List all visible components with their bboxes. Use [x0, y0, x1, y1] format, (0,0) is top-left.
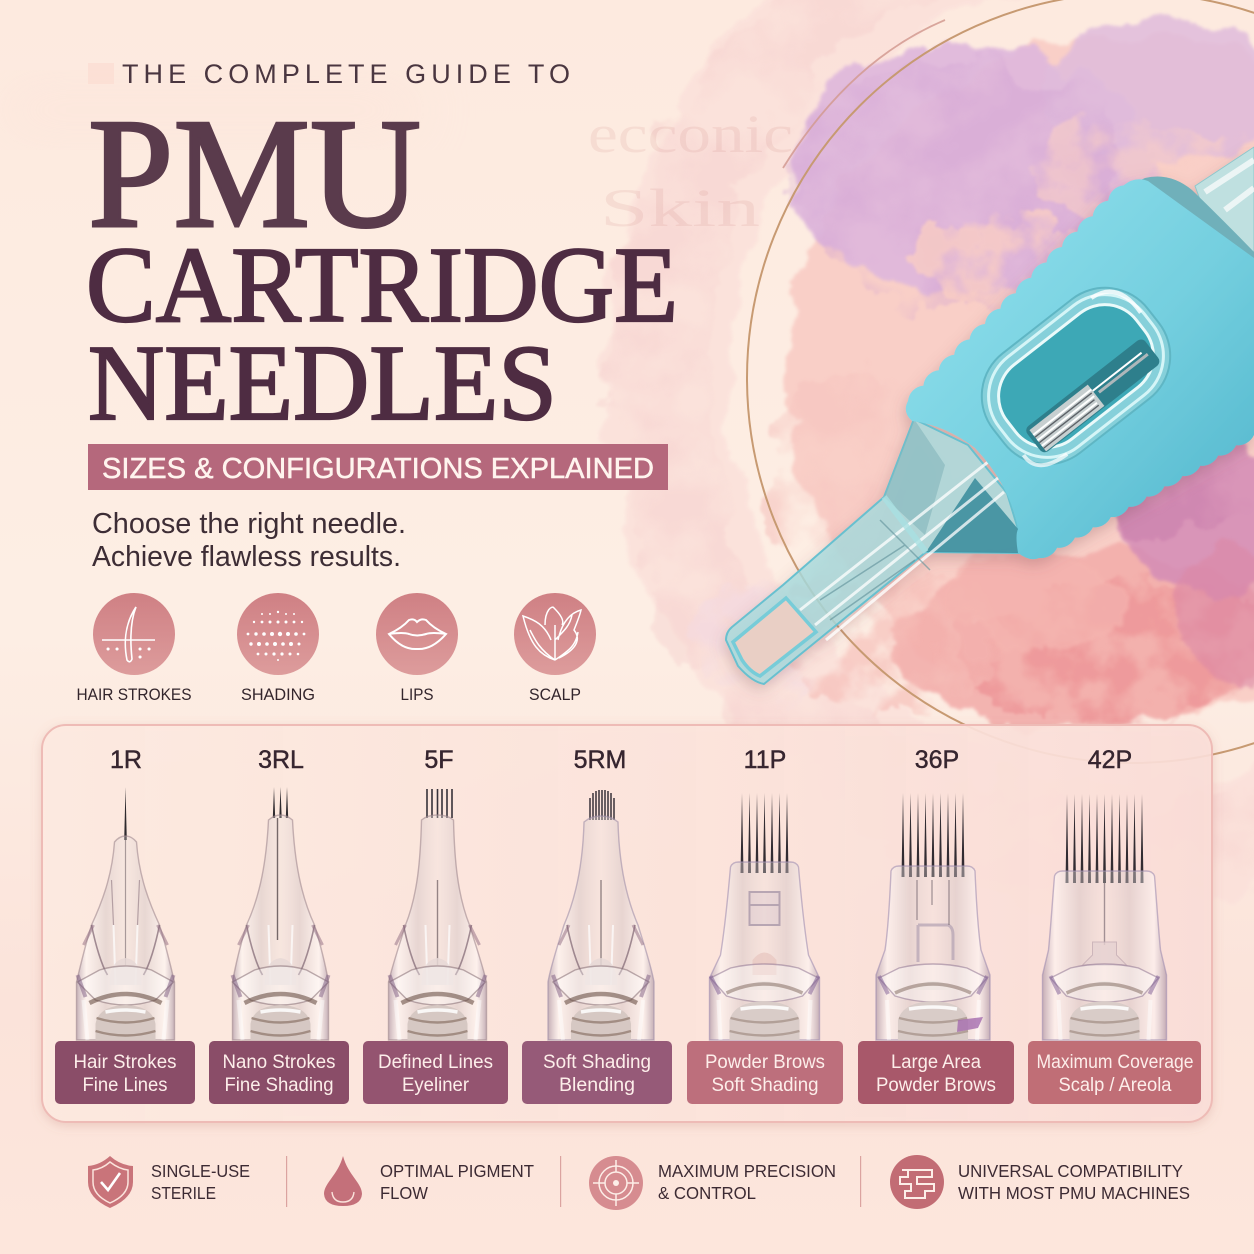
icon: hair strokes: HAIR STROKES — [76, 686, 192, 704]
icon: shading — [237, 593, 319, 704]
feature: optimal pigment flow: OPTIMAL PIGMENT — [380, 1161, 534, 1181]
feature: optimal pigment flow — [324, 1156, 534, 1206]
paint disc — [787, 33, 1254, 723]
feature: maximum precision and control — [589, 1156, 836, 1210]
clear funnel and shaft — [726, 419, 1018, 684]
feature: single-use sterile — [88, 1156, 250, 1208]
label: soft shading, blending: Soft Shading — [543, 1052, 651, 1073]
faint watermark text: Skin — [600, 178, 760, 238]
title: NEEDLES — [88, 324, 557, 443]
cartridge 42P — [1042, 746, 1166, 1040]
rear clear tube — [1195, 147, 1254, 262]
label: large area, powder brows: Large Area — [891, 1052, 981, 1073]
feature: universal compatibility: WITH MOST PMU MACHINES — [958, 1183, 1190, 1203]
cartridge 36P: 36P — [915, 746, 959, 774]
faint watermark text — [588, 104, 793, 238]
tagline: Achieve flawless results. — [92, 541, 401, 573]
cartridge 11P: 11P — [744, 746, 786, 774]
title: CARTRIDGE — [86, 226, 678, 345]
cartridge 42P: 42P — [1088, 746, 1132, 774]
clear tip window — [733, 598, 816, 676]
icon: scalp leaves — [514, 593, 596, 704]
panel: needle sizes — [42, 725, 1212, 1122]
cartridge 5F: 5F — [424, 746, 454, 774]
feature: universal compatibility: UNIVERSAL COMPATIBILITY — [958, 1161, 1183, 1181]
label: defined lines, eyeliner — [363, 1041, 508, 1104]
icon: lips: LIPS — [400, 686, 434, 704]
label: powder brows, soft shading: Soft Shading — [712, 1075, 818, 1096]
label: nano strokes, fine shading — [209, 1041, 349, 1104]
label: powder brows, soft shading: Powder Brows — [705, 1052, 825, 1073]
label: large area, powder brows — [858, 1041, 1014, 1104]
gold ring — [747, 0, 1254, 763]
label: powder brows, soft shading — [687, 1041, 843, 1104]
feature: maximum precision and control: & CONTROL — [658, 1183, 756, 1203]
label: defined lines, eyeliner: Eyeliner — [402, 1075, 470, 1096]
window — [960, 266, 1192, 486]
label: hair strokes, fine lines — [55, 1041, 195, 1104]
divider — [860, 1156, 861, 1207]
cartridge 36P — [876, 746, 990, 1040]
label: defined lines, eyeliner: Defined Lines — [378, 1052, 493, 1073]
title: PMU — [88, 86, 421, 260]
outer pale pink wash — [667, 0, 1254, 843]
cartridge 5F — [388, 746, 486, 1040]
icon: scalp leaves: SCALP — [529, 686, 581, 704]
cartridge 3RL: 3RL — [258, 746, 304, 774]
label: soft shading, blending: Blending — [559, 1075, 635, 1096]
icon: shading: SHADING — [241, 686, 315, 704]
label: soft shading, blending — [522, 1041, 672, 1104]
feature: universal compatibility — [890, 1155, 1190, 1209]
label: large area, powder brows: Powder Brows — [876, 1075, 996, 1096]
feature: maximum precision and control: MAXIMUM PRECISION — [658, 1161, 836, 1181]
divider — [286, 1156, 287, 1207]
label: nano strokes, fine shading: Nano Strokes — [222, 1052, 336, 1073]
label: hair strokes, fine lines: Hair Strokes — [74, 1052, 176, 1073]
label: maximum coverage, scalp / areola: Scalp / Areola — [1058, 1075, 1172, 1096]
title — [86, 86, 678, 443]
subtitle ribbon — [88, 444, 668, 490]
faint watermark text: ecconic — [588, 104, 793, 164]
cartridge 5RM: 5RM — [574, 746, 626, 774]
label: hair strokes, fine lines: Fine Lines — [82, 1075, 168, 1096]
feature: single-use sterile: SINGLE-USE — [151, 1161, 250, 1181]
feature: optimal pigment flow: FLOW — [380, 1183, 428, 1203]
cartridge 1R: 1R — [110, 746, 142, 774]
tagline: Choose the right needle. — [92, 508, 406, 540]
cartridge 5RM — [548, 746, 654, 1040]
cartridge 3RL — [232, 746, 328, 1040]
icon: lips — [376, 593, 458, 704]
feature: single-use sterile: STERILE — [151, 1183, 216, 1203]
product: turquoise cartridge — [726, 147, 1254, 684]
silicone body — [906, 179, 1254, 559]
label: maximum coverage, scalp / areola: Maximum Coverage — [1036, 1052, 1194, 1073]
divider — [560, 1156, 561, 1207]
cartridge 11P — [710, 746, 820, 1040]
label: nano strokes, fine shading: Fine Shading — [224, 1075, 334, 1096]
subtitle ribbon: SIZES & CONFIGURATIONS EXPLAINED — [102, 453, 654, 485]
heading: the complete guide to: THE COMPLETE GUIDE TO — [122, 59, 570, 89]
icon: hair strokes — [76, 593, 192, 704]
tagline — [92, 508, 406, 573]
label: maximum coverage, scalp / areola — [1028, 1041, 1201, 1104]
cartridge 1R — [76, 746, 174, 1040]
